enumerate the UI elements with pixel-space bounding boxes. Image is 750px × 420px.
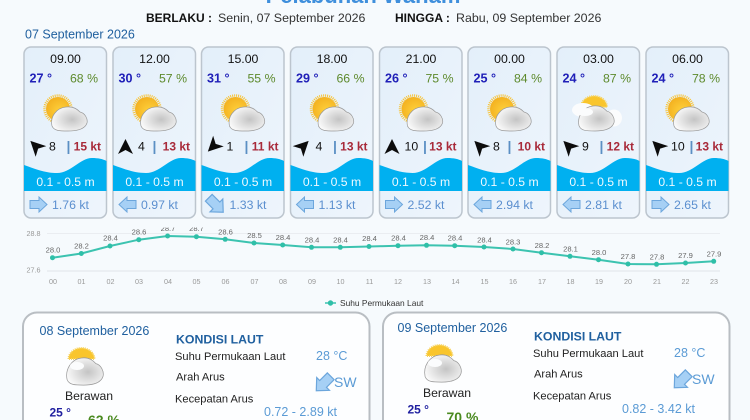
panel: forecast 09.00: 0.1 - 0.5 m — [36, 175, 95, 189]
data points — [50, 234, 716, 267]
data labels: 28.4 — [362, 234, 377, 243]
validity line: Rabu, 09 September 2026 — [456, 11, 601, 25]
panel: forecast 18.00: 29 ° — [296, 72, 319, 86]
wave — [646, 158, 728, 191]
x axis labels: 04 — [164, 277, 172, 286]
x axis labels: 20 — [624, 277, 632, 286]
data labels: 28.6 — [218, 228, 233, 236]
panel: 09 September 2026: 0.82 - 3.42 kt — [622, 402, 695, 416]
x axis labels: 13 — [423, 277, 431, 286]
panel: forecast 12.00: 12.00 — [139, 52, 170, 66]
x axis labels: 09 — [308, 277, 316, 286]
panel: forecast 06.00: 78 % — [692, 72, 720, 86]
data labels: 28.4 — [391, 234, 406, 242]
data labels: 28.4 — [448, 234, 462, 242]
panel: forecast 12.00: 57 % — [159, 72, 187, 86]
data labels: 27.9 — [707, 250, 721, 258]
panel: forecast 03.00: 9 — [582, 140, 589, 154]
legend: Suhu Permukaan Laut — [340, 298, 424, 308]
panel: forecast 03.00: 03.00 — [583, 52, 614, 66]
x axis labels: 22 — [682, 277, 690, 286]
panel: forecast 06.00: 0.1 - 0.5 m — [658, 175, 717, 189]
icon: current arrow — [386, 197, 402, 212]
icon: current arrow — [474, 197, 491, 212]
wave — [24, 158, 106, 191]
wave — [290, 158, 373, 191]
icon: partly cloudy — [666, 96, 709, 131]
weather label: Berawan — [65, 389, 113, 403]
panel: forecast 21.00: 10 — [404, 140, 418, 154]
panel: forecast 09.00: 09.00 — [50, 52, 81, 66]
data labels: 28.4 — [477, 236, 492, 244]
panel: forecast 03.00: 0.1 - 0.5 m — [569, 175, 628, 189]
panel: forecast 21.00: 2.52 kt — [408, 198, 445, 212]
panel: 09 September 2026 — [383, 312, 730, 420]
panel: forecast 18.00: 13 kt — [340, 140, 368, 154]
x axis labels — [49, 277, 718, 286]
panel: forecast 12.00: 13 kt — [163, 140, 190, 154]
panel: forecast 00.00: 00.00 — [494, 52, 525, 66]
panel: forecast 15.00: 0.1 - 0.5 m — [214, 175, 272, 189]
icon: partly cloudy — [222, 96, 265, 131]
wave — [202, 158, 284, 191]
panel: forecast 21.00: 26 ° — [385, 72, 408, 86]
panel: 09 September 2026: SW — [692, 371, 715, 387]
panel: forecast 15.00 — [202, 47, 284, 219]
icon: current arrow — [563, 197, 580, 212]
x axis labels: 10 — [336, 277, 344, 286]
x axis labels: 00 — [49, 277, 57, 286]
panel: forecast 15.00: 1.33 kt — [230, 198, 267, 212]
panel: forecast 06.00: 2.65 kt — [674, 198, 711, 212]
x axis labels: 15 — [480, 277, 488, 286]
panel: forecast 00.00: 84 % — [514, 72, 542, 86]
panel: forecast 03.00: 24 ° — [562, 72, 585, 86]
x axis labels: 17 — [538, 277, 546, 286]
sea conditions heading: KONDISI LAUT — [176, 332, 264, 346]
x axis labels: 08 — [279, 277, 287, 286]
data labels: 28.5 — [247, 231, 262, 240]
panel: forecast 09.00: | — [66, 138, 70, 154]
wave — [380, 158, 462, 191]
data labels: 28.3 — [506, 238, 520, 246]
icon: partly cloudy — [311, 96, 354, 131]
panel: forecast 21.00: 75 % — [425, 72, 454, 86]
temperature: 25 ° — [408, 402, 429, 416]
date: 09 September 2026 — [398, 321, 507, 335]
data labels: 28.0 — [592, 248, 606, 257]
icon: cloudy — [572, 96, 622, 131]
x axis labels: 21 — [653, 277, 661, 286]
icon: wind arrow — [293, 136, 314, 157]
wave — [557, 158, 640, 191]
icon: partly cloudy — [44, 96, 87, 131]
panel: forecast 21.00: 13 kt — [429, 140, 456, 154]
validity line: HINGGA : — [395, 11, 450, 25]
icon: partly cloudy — [134, 96, 176, 131]
panel: forecast 09.00: 15 kt — [74, 140, 101, 154]
icon: wind arrow — [469, 136, 490, 157]
panel: forecast 21.00 — [380, 47, 462, 218]
panel: forecast 18.00: 0.1 - 0.5 m — [303, 175, 361, 189]
icon: wind arrow — [647, 136, 668, 157]
data labels: 28.2 — [535, 241, 549, 250]
x axis labels: 02 — [106, 277, 114, 286]
sea surface temperature: Suhu Permukaan Laut — [175, 351, 285, 363]
icon: cloudy — [67, 348, 103, 385]
wave — [113, 158, 196, 191]
panel: 08 September 2026: 0.72 - 2.89 kt — [264, 405, 337, 419]
current speed: Kecepatan Arus — [175, 394, 254, 406]
data labels: 28.4 — [103, 234, 118, 242]
panel: forecast 06.00 — [646, 47, 728, 218]
panel: forecast 00.00: 2.94 kt — [496, 198, 533, 212]
current speed: Kecepatan Arus — [533, 390, 612, 402]
x axis labels: 01 — [78, 277, 86, 286]
data line — [52, 236, 714, 264]
panel: forecast 15.00: 1 — [226, 140, 234, 154]
icon: wind arrow — [25, 136, 46, 157]
icon: current arrow — [119, 197, 136, 212]
panel: forecast 06.00: 13 kt — [696, 140, 723, 154]
current direction: Arah Arus — [176, 372, 225, 384]
icon: current arrow — [202, 191, 230, 219]
icon: cloudy — [425, 345, 461, 382]
panel: forecast 12.00: 0.97 kt — [141, 198, 178, 212]
data labels: 28.4 — [276, 233, 290, 242]
data labels: 28.7 — [189, 224, 204, 233]
data labels: 27.8 — [621, 252, 635, 261]
temperature: 25 ° — [50, 406, 71, 420]
panel: forecast 09.00 — [24, 47, 106, 218]
panel: forecast 12.00: 4 — [138, 140, 145, 154]
x axis labels: 16 — [509, 277, 517, 286]
data labels: 28.4 — [333, 236, 348, 244]
panel: 08 September 2026: 28 °C — [316, 349, 347, 363]
x axis labels: 23 — [710, 277, 718, 286]
panel: forecast 00.00: 25 ° — [474, 72, 496, 86]
x axis labels: 05 — [192, 277, 200, 286]
line chart: sea surface temperature: 28.8 — [26, 229, 40, 238]
panel: forecast 18.00: 1.13 kt — [318, 198, 356, 212]
data labels: 28.6 — [132, 228, 146, 236]
icon: wind arrow — [558, 136, 579, 157]
panel: forecast 12.00: 30 ° — [118, 72, 141, 86]
wave — [468, 158, 550, 191]
line chart: sea surface temperature: 27.6 — [26, 266, 40, 274]
panel: forecast 00.00: 0.1 - 0.5 m — [480, 175, 539, 189]
icon: partly cloudy — [488, 96, 531, 131]
panel: forecast 03.00: 2.81 kt — [585, 198, 622, 212]
icon: wind arrow — [118, 139, 133, 154]
panel: forecast 12.00: | — [152, 138, 156, 154]
data labels: 28.0 — [46, 246, 60, 254]
panel: forecast 06.00: 10 — [671, 140, 685, 154]
panel: forecast 12.00: 0.1 - 0.5 m — [125, 175, 184, 189]
panel: forecast 21.00: | — [423, 138, 427, 154]
panel: forecast 06.00: | — [690, 138, 693, 154]
icon: current arrow — [652, 197, 669, 212]
data labels: 28.7 — [161, 224, 175, 233]
icon: wind arrow — [384, 139, 400, 154]
x axis labels: 11 — [366, 277, 373, 286]
panel: 09 September 2026: 28 °C — [674, 346, 705, 360]
x axis labels: 03 — [135, 277, 143, 286]
date: 08 September 2026 — [40, 324, 149, 338]
panel: forecast 03.00: 87 % — [603, 72, 631, 86]
data labels: 28.2 — [74, 242, 89, 250]
icon: current arrow — [30, 197, 47, 212]
line chart: sea surface temperature — [26, 221, 721, 308]
panel: forecast 21.00: 21.00 — [406, 52, 437, 66]
panel: forecast 21.00: 0.1 - 0.5 m — [392, 175, 450, 189]
x axis labels: 12 — [394, 277, 402, 286]
panel: forecast 15.00: 11 kt — [252, 140, 278, 154]
panel: forecast 18.00: 66 % — [336, 72, 365, 86]
panel: forecast 00.00: | — [508, 138, 511, 154]
x axis labels: 18 — [566, 277, 574, 286]
x axis labels: 06 — [222, 277, 230, 286]
panel: 08 September 2026: SW — [334, 374, 357, 390]
validity line: BERLAKU : — [146, 11, 212, 25]
panel: forecast 00.00: 10 kt — [518, 140, 545, 154]
data labels: 27.9 — [678, 251, 693, 260]
panel: forecast 18.00 — [290, 47, 373, 218]
x axis labels: 14 — [452, 277, 460, 286]
panel: forecast 09.00: 1.76 kt — [52, 198, 89, 212]
panel: 08 September 2026 — [23, 312, 370, 420]
panel: forecast 00.00 — [468, 47, 550, 218]
panel: forecast 03.00 — [557, 47, 640, 218]
panel: forecast 15.00: 31 ° — [207, 72, 230, 86]
x axis labels: 07 — [250, 277, 258, 286]
icon: partly cloudy — [400, 96, 443, 131]
panel: forecast 00.00: 8 — [493, 140, 500, 154]
panel: forecast 09.00: 68 % — [70, 72, 98, 86]
panel: forecast 15.00: | — [244, 138, 248, 154]
current direction: Arah Arus — [534, 368, 583, 380]
panel: forecast 15.00: 55 % — [247, 72, 276, 86]
icon: wind arrow — [203, 136, 224, 157]
panel: forecast 09.00: 27 ° — [30, 72, 52, 86]
validity line — [146, 11, 601, 25]
panel: forecast 12.00 — [113, 47, 196, 218]
icon: current arrow — [296, 197, 314, 212]
validity line: Senin, 07 September 2026 — [218, 11, 366, 25]
panel: forecast 18.00: 18.00 — [317, 52, 348, 66]
panel: forecast 18.00: | — [333, 138, 337, 154]
panel: forecast 06.00: 24 ° — [652, 72, 674, 86]
panel: forecast 09.00: 8 — [49, 140, 56, 154]
data labels: 27.8 — [650, 252, 664, 262]
panel: forecast 15.00: 15.00 — [228, 52, 259, 66]
sea conditions heading: KONDISI LAUT — [534, 330, 622, 344]
sea surface temperature: Suhu Permukaan Laut — [533, 348, 643, 360]
panel: forecast 03.00: | — [600, 138, 603, 154]
panel: forecast 18.00: 4 — [316, 140, 322, 154]
data labels: 28.4 — [305, 236, 319, 244]
data labels: 28.1 — [563, 244, 578, 254]
data labels: 28.4 — [420, 233, 434, 242]
panel: forecast 06.00: 06.00 — [672, 52, 703, 66]
date heading: 07 September 2026 — [25, 28, 135, 42]
weather label: Berawan — [423, 386, 471, 400]
panel: forecast 03.00: 12 kt — [607, 140, 634, 154]
x axis labels: 19 — [595, 277, 603, 286]
data labels — [46, 224, 721, 262]
